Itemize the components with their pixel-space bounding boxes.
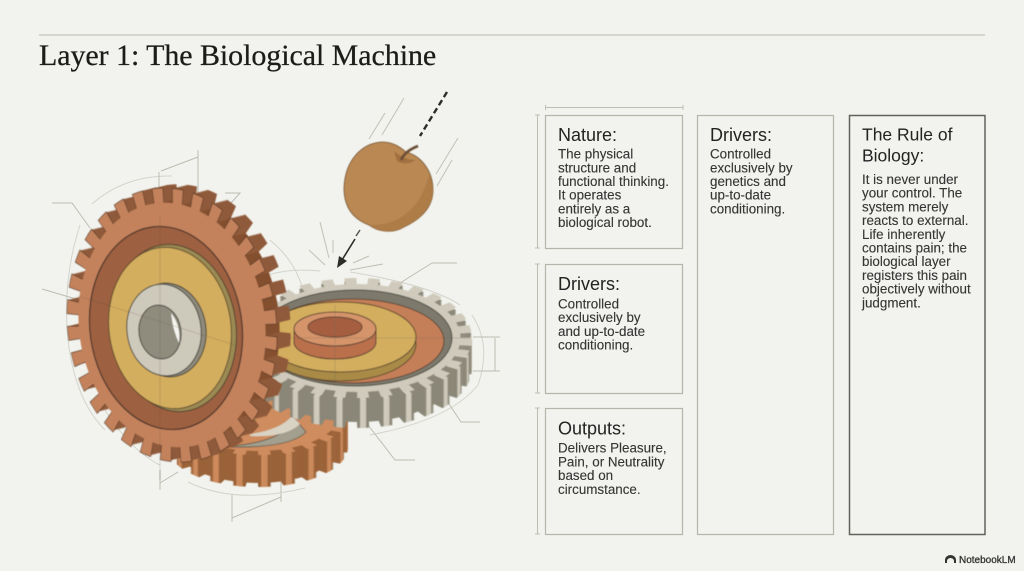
text: Nature body: entirely as a (558, 202, 631, 216)
text: Drivers body: conditioning. (710, 202, 785, 216)
text: Drivers body: conditioning. (558, 338, 633, 352)
illustration: large upright gear (57, 179, 301, 480)
text: Drivers body: up-to-date (710, 188, 771, 203)
logo: NotebookLM (945, 555, 1016, 566)
title: Layer 1: The Biological Machine (39, 39, 436, 72)
heading: Drivers: Drivers: (710, 125, 772, 145)
heading: Drivers: Drivers: (558, 274, 620, 294)
heading: Nature: Nature: (558, 125, 617, 145)
panel: The Rule of Biology (850, 116, 985, 534)
heading: The Rule of Biology: The Rule of (862, 125, 953, 145)
illustration: motion and impact lines (309, 98, 458, 270)
panel: Nature (546, 116, 682, 248)
illustration: lower orange gear (173, 377, 343, 485)
panel: Drivers (middle column) (698, 116, 834, 534)
text: Drivers body: Controlled (558, 296, 619, 311)
text: Outputs body: Delivers Pleasure, (558, 441, 667, 456)
illustration: construction lines behind gears (42, 150, 500, 522)
text: Rule of Biology body: system merely (862, 199, 949, 214)
illustration: horizontal grey gear (249, 282, 470, 424)
text: Rule of Biology body: registers this pain (862, 268, 967, 283)
panel: Outputs (546, 408, 682, 534)
text: Rule of Biology body: biological layer (862, 254, 951, 269)
text: Rule of Biology body: It is never under (862, 172, 959, 187)
text: Rule of Biology body: contains pain; the (862, 240, 967, 256)
text: Drivers body: genetics and (710, 174, 786, 189)
illustration: falling apple (344, 142, 433, 231)
text: Rule of Biology body: Life inherently (862, 227, 946, 242)
text: Outputs body: circumstance. (558, 482, 641, 497)
text: Drivers body: exclusively by (710, 160, 793, 175)
text: Rule of Biology body: reacts to external. (862, 213, 968, 228)
text: Outputs body: based on (558, 468, 613, 483)
text: Outputs body: Pain, or Neutrality (558, 454, 665, 470)
text: Rule of Biology body: objectively without (862, 282, 971, 297)
heading: The Rule of Biology: Biology: (862, 146, 924, 166)
icon: NotebookLM mark (945, 555, 956, 563)
text: Nature body: structure and (558, 160, 636, 175)
text: Rule of Biology body: your control. The (862, 186, 962, 201)
panel: Drivers (left column) (546, 264, 682, 394)
heading: Outputs: Outputs: (558, 418, 626, 438)
text: Nature body: The physical (558, 146, 633, 162)
illustration: dashed trajectory and arrow (337, 92, 447, 268)
text: NotebookLM: NotebookLM (959, 555, 1016, 566)
text: Rule of Biology body: judgment. (861, 295, 921, 310)
text: Nature body: It operates (558, 188, 622, 203)
text: Drivers body: and up-to-date (558, 324, 645, 339)
text: Drivers body: exclusively by (558, 310, 641, 325)
text: Drivers body: Controlled (710, 146, 771, 162)
text: Nature body: functional thinking. (558, 174, 669, 189)
text: Nature body: biological robot. (558, 215, 652, 230)
